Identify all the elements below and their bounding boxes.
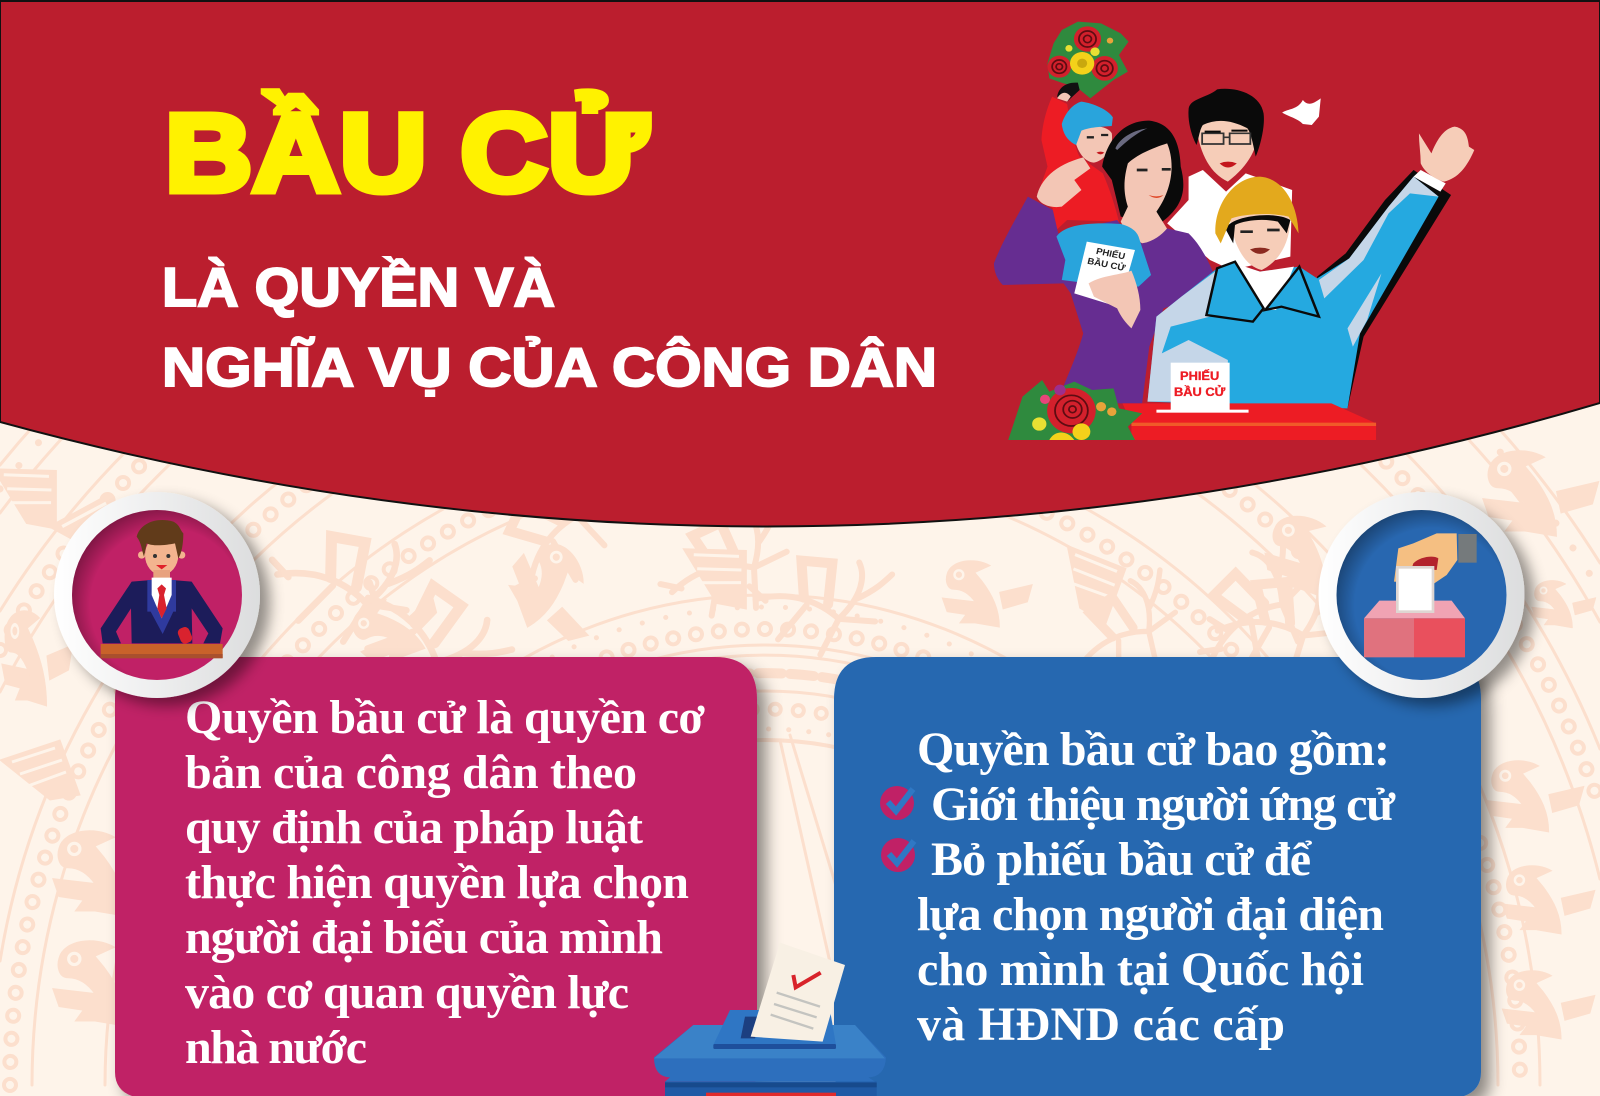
subtitle: LÀ QUYỀN VÀ bbox=[162, 256, 555, 318]
red header banner bbox=[0, 1, 1600, 526]
icon: ballot box with paper bbox=[654, 943, 886, 1096]
figure: woman: BẦU CỬ bbox=[1086, 255, 1127, 273]
paragraph: definition: bản của công dân theo bbox=[185, 746, 637, 799]
illustration: voters bbox=[994, 22, 1474, 440]
figure: woman bbox=[994, 121, 1214, 403]
list: rights: lựa chọn người đại diện bbox=[917, 888, 1384, 941]
list: rights: Bỏ phiếu bầu cử để bbox=[931, 833, 1313, 886]
list: rights bbox=[917, 723, 1396, 1051]
subtitle bbox=[162, 256, 937, 398]
panel: definition bbox=[115, 657, 757, 1096]
figure: man with glasses bbox=[1167, 89, 1292, 270]
ballot box: BẦU CỬ bbox=[1174, 384, 1226, 399]
list: rights: cho mình tại Quốc hội bbox=[917, 943, 1364, 996]
title: BẦU CỬ bbox=[165, 92, 649, 215]
paragraph: definition: người đại biểu của mình bbox=[185, 911, 663, 964]
paragraph: definition: Quyền bầu cử là quyền cơ bbox=[185, 691, 705, 744]
figure: woman: PHIẾU bbox=[1095, 246, 1126, 261]
panel: rights list bbox=[834, 657, 1481, 1096]
paragraph: definition: quy định của pháp luật bbox=[185, 801, 643, 854]
list: rights: Quyền bầu cử bao gồm: bbox=[917, 723, 1390, 776]
icon: hand casting vote badge bbox=[1318, 492, 1524, 698]
list: rights: và HĐND các cấp bbox=[917, 998, 1285, 1051]
ballot box bbox=[1122, 363, 1376, 440]
icon: check 2 bbox=[881, 838, 915, 872]
icon: lower bouquet bbox=[1008, 380, 1142, 440]
icon: check 1 bbox=[880, 786, 914, 820]
paragraph: definition: vào cơ quan quyền lực bbox=[185, 966, 629, 1019]
paragraph: definition: thực hiện quyền lựa chọn bbox=[185, 856, 689, 909]
ballot box: PHIẾU bbox=[1180, 368, 1219, 383]
figure: child bbox=[1037, 83, 1119, 245]
paragraph: definition bbox=[185, 691, 705, 1074]
figure: worker bbox=[1147, 127, 1474, 408]
list: rights: Giới thiệu người ứng cử bbox=[931, 778, 1396, 831]
icon: upper bouquet bbox=[1047, 22, 1129, 98]
subtitle: NGHĨA VỤ CỦA CÔNG DÂN bbox=[162, 336, 937, 398]
icon: dove bbox=[1282, 98, 1321, 125]
icon: speaker badge bbox=[54, 492, 260, 698]
paragraph: definition: nhà nước bbox=[185, 1021, 367, 1074]
